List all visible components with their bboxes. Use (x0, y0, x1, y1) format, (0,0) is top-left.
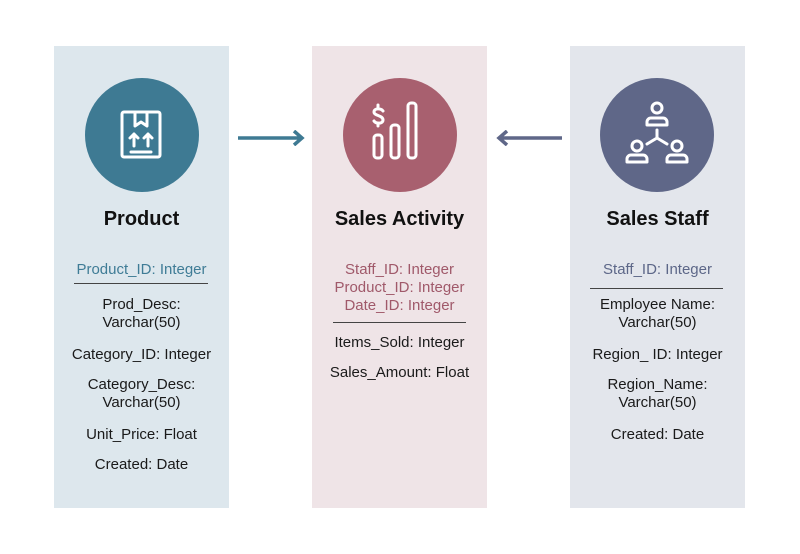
panel: sales staff: Region_ ID: Integer (592, 346, 723, 363)
icon: product box (85, 78, 199, 192)
panel: sales staff (570, 46, 745, 508)
key field: product: Product_ID: Integer (76, 261, 207, 278)
key fields: sales activity: Staff_ID: Integer (345, 261, 454, 278)
panel: sales staff: Region_Name: (607, 376, 708, 393)
fields: product: Prod_Desc: (102, 296, 181, 313)
key fields: sales activity: Product_ID: Integer (334, 279, 465, 296)
arrow: product to sales (238, 130, 304, 146)
key fields: sales activity (334, 261, 465, 314)
panel: product (54, 46, 229, 508)
title: sales activity: Sales Activity (335, 208, 464, 230)
panel: sales staff: Varchar(50) (618, 394, 697, 411)
panel: product: Varchar(50) (102, 394, 181, 411)
fields: sales activity: Items_Sold: Integer (334, 334, 465, 351)
icon: sales chart (343, 78, 457, 192)
panel: sales activity: Sales_Amount: Float (330, 364, 469, 381)
key field: sales staff: Staff_ID: Integer (603, 261, 712, 278)
panel: product: Created: Date (95, 456, 188, 473)
fields: sales staff: Varchar(50) (618, 314, 697, 331)
panel: sales staff: Created: Date (611, 426, 704, 443)
key fields: sales activity: Date_ID: Integer (344, 297, 455, 314)
arrow: staff to sales (496, 130, 562, 146)
fields: sales staff: Employee Name: (600, 296, 715, 313)
title: sales staff: Sales Staff (606, 208, 709, 230)
title: product: Product (104, 208, 179, 230)
panel: product: Category_ID: Integer (72, 346, 211, 363)
panel: product: Category_Desc: (88, 376, 195, 393)
fields: product: Varchar(50) (102, 314, 181, 331)
fields: sales staff (600, 296, 715, 331)
icon: staff hierarchy (600, 78, 714, 192)
fields: product (102, 296, 181, 331)
panel: product: Unit_Price: Float (86, 426, 197, 443)
panel: sales activity (312, 46, 487, 508)
